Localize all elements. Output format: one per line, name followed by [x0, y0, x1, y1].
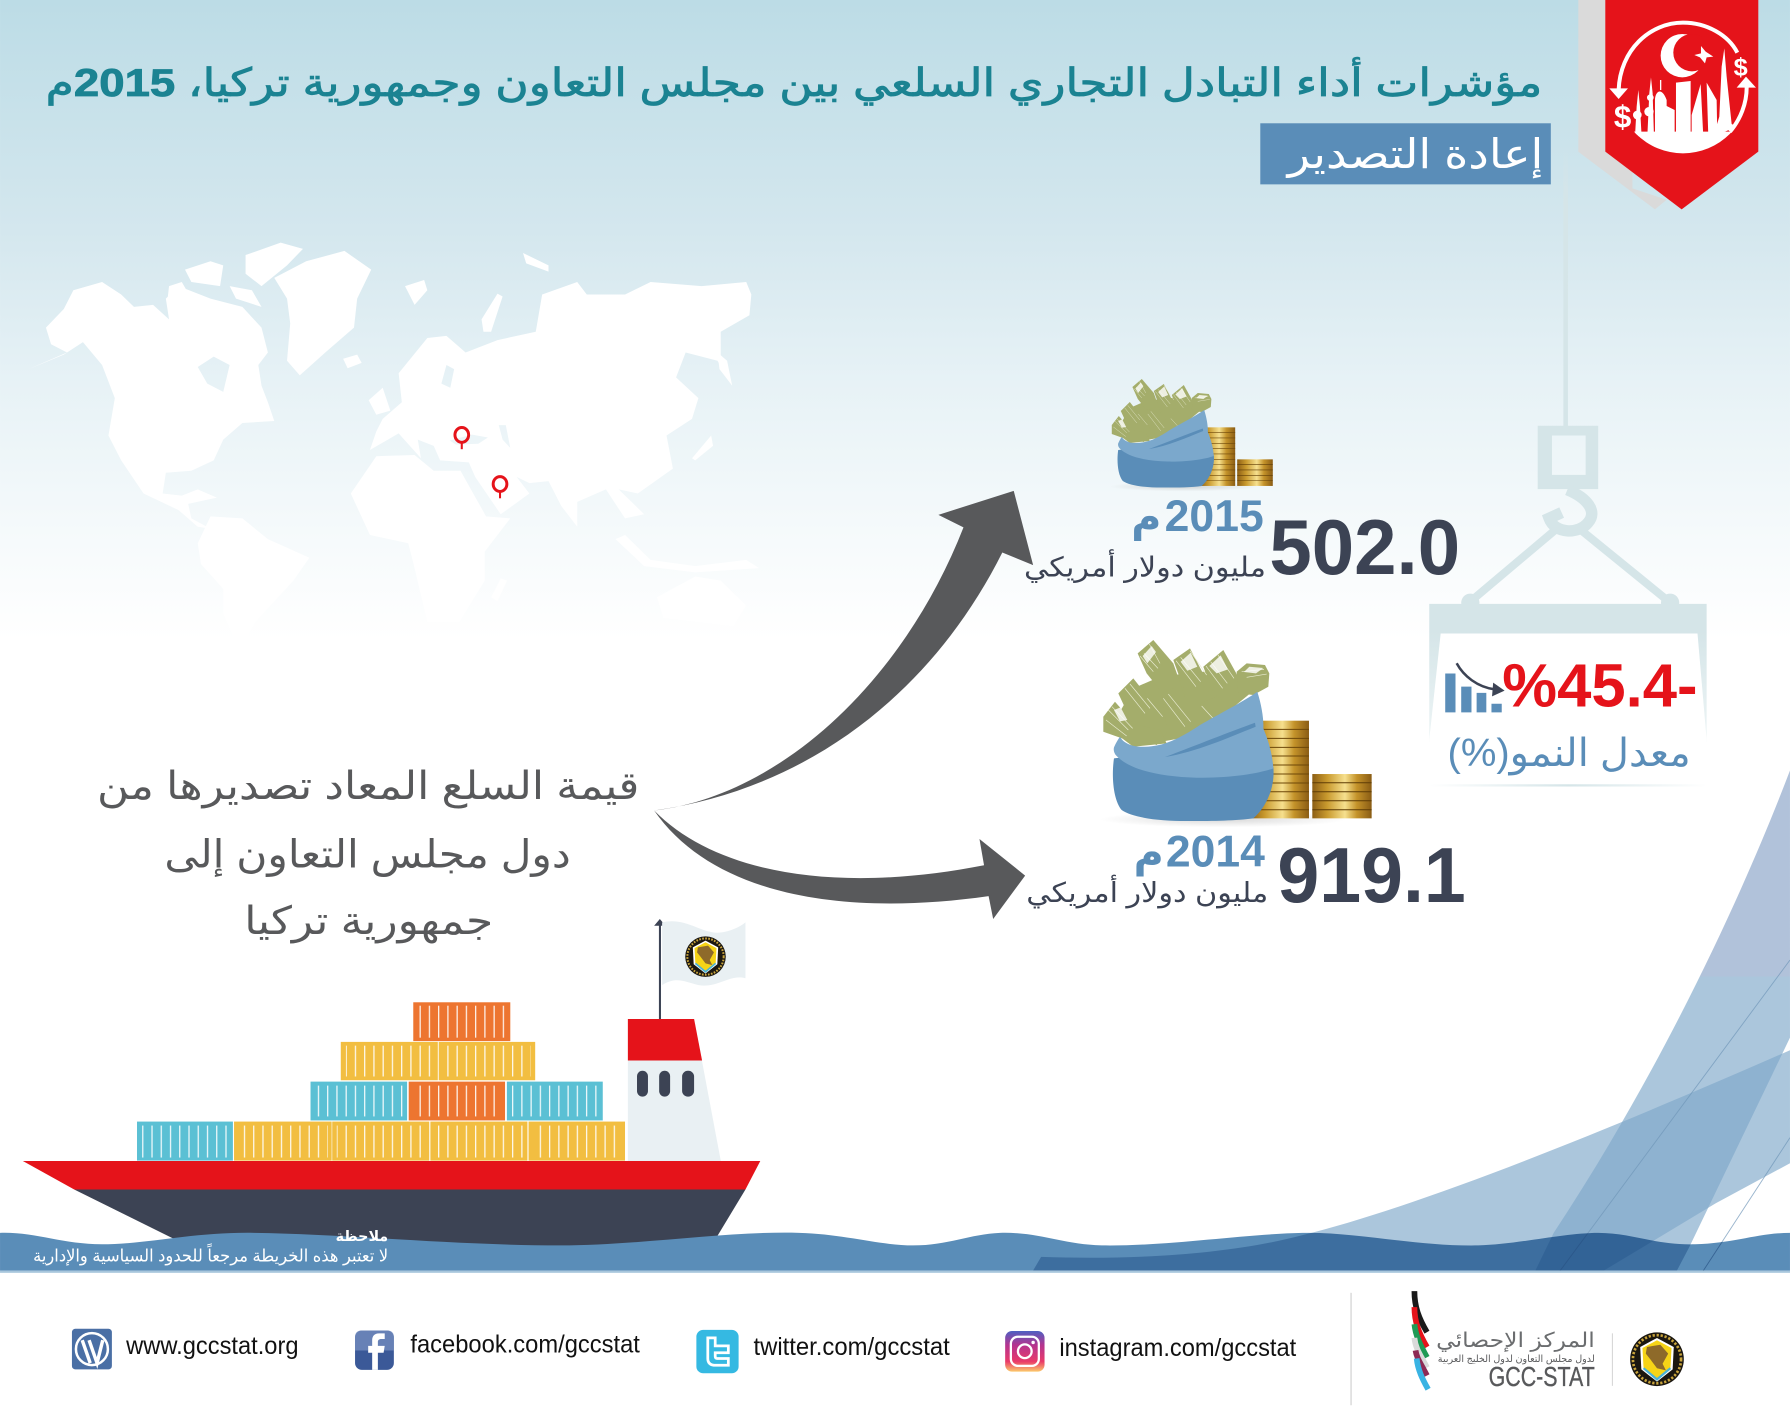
containers [137, 1002, 625, 1161]
crane [1461, 148, 1679, 612]
GCC-STAT logo [1414, 1291, 1684, 1392]
icon: crescent [1661, 34, 1711, 77]
hook [1549, 490, 1592, 531]
growth rate panel [1429, 604, 1707, 787]
stat 2015: م [1131, 494, 1161, 542]
footer links: twitter.com/gccstat [753, 1333, 950, 1361]
ship tower [628, 1019, 721, 1162]
corner ribbon [1578, 0, 1758, 209]
growth label: معدل النمو(%) [1448, 732, 1691, 776]
stat 2015: 2015 [1165, 492, 1264, 541]
GCC-STAT logo: المركز الإحصائي [1436, 1329, 1595, 1352]
icon: falling bars [1445, 663, 1505, 712]
decorative sails and sea [0, 771, 1790, 1272]
footer divider [1350, 1293, 1352, 1405]
description text: دول مجلس التعاون إلى [164, 834, 571, 878]
stat 2015: 502.0 [1269, 505, 1460, 591]
flag [662, 921, 745, 986]
north america [29, 282, 274, 529]
subtitle box [1260, 123, 1551, 184]
icon: instagram [1005, 1331, 1045, 1372]
world map [29, 243, 759, 650]
greenland [274, 251, 371, 375]
map disclaimer note [33, 1229, 388, 1265]
south america [198, 516, 309, 650]
subtitle box: إعادة التصدير [1285, 131, 1543, 178]
stat 2015 [1024, 492, 1460, 591]
flag emblem [685, 936, 726, 977]
title: مؤشرات أداء التبادل التجاري السلعي بين مجلس التعاون وجمهورية تركيا، 2015م [46, 57, 1542, 106]
map disclaimer note: ملاحظة [336, 1229, 388, 1245]
indonesia [615, 535, 759, 572]
logo ribbon [1414, 1291, 1428, 1389]
stat 2014: مليون دولار أمريكي [1026, 874, 1268, 909]
map pin: Turkey [455, 428, 469, 449]
ribbon icon [1605, 0, 1758, 209]
money bag 2015 [1110, 379, 1273, 491]
iceland [343, 355, 362, 368]
hull [23, 1161, 760, 1189]
footer links: instagram.com/gccstat [1059, 1334, 1296, 1362]
stat 2014: 2014 [1166, 827, 1265, 876]
sea wave [0, 1233, 1790, 1271]
icon: star [1694, 46, 1713, 63]
arrow to 2014 [654, 811, 1025, 919]
GCC-STAT logo: لدول مجلس التعاون لدول الخليج العربية [1438, 1354, 1595, 1365]
australia [657, 576, 746, 626]
GCC emblem [1630, 1332, 1684, 1386]
ship [23, 919, 760, 1250]
icon: facebook [355, 1330, 394, 1370]
stat 2014 [1026, 827, 1466, 919]
africa [351, 455, 510, 622]
cables [1470, 527, 1669, 602]
sail sweep [1033, 1050, 1790, 1271]
ribbon icon: $ [1734, 54, 1748, 82]
stat 2015: مليون دولار أمريكي [1024, 548, 1266, 583]
stat 2014: م [1134, 829, 1164, 877]
madagascar [491, 579, 507, 601]
canadian arctic [167, 243, 303, 307]
arrow to 2015 [654, 491, 1033, 811]
icon: twitter [696, 1330, 739, 1373]
hook block [1538, 426, 1598, 489]
japan [692, 353, 732, 460]
ribbon icon: $ [1614, 99, 1631, 134]
footer links: facebook.com/gccstat [410, 1331, 640, 1359]
description text [97, 765, 639, 944]
growth value: %45.4- [1502, 652, 1698, 721]
footer links: www.gccstat.org [125, 1332, 299, 1360]
icon: wordpress [72, 1329, 112, 1369]
svalbard and novaya zemlya [405, 253, 549, 332]
sail left [1535, 771, 1790, 1271]
GCC-STAT logo: GCC-STAT [1489, 1361, 1595, 1392]
money bag 2014 [1100, 640, 1372, 827]
mast [654, 919, 666, 1019]
stat 2014: 919.1 [1277, 833, 1466, 919]
eurasia [370, 282, 751, 527]
british isles [369, 388, 390, 415]
description text: جمهورية تركيا [244, 900, 493, 944]
description text: قيمة السلع المعاد تصديرها من [97, 765, 639, 809]
footer links [72, 1329, 1296, 1373]
map disclaimer note: لا تعتبر هذه الخريطة مرجعاً للحدود السياسية والإدارية [33, 1243, 388, 1265]
background gradient [0, 0, 1790, 639]
map pin: GCC [493, 477, 507, 498]
